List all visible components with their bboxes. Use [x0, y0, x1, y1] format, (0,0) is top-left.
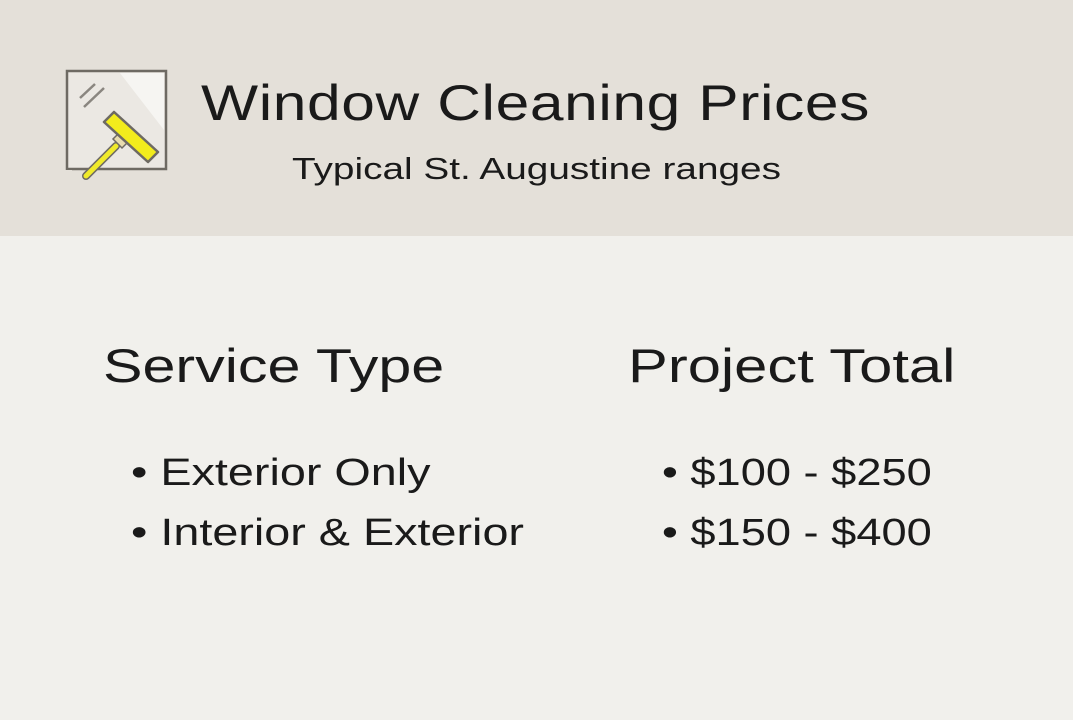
list: prices: • $100 - $250 — [662, 452, 932, 494]
list: services: • Interior & Exterior — [131, 512, 524, 554]
list: prices — [662, 452, 932, 554]
panel: service type — [103, 339, 524, 554]
heading: service type: Service Type — [103, 339, 444, 392]
header band — [0, 0, 1073, 236]
icon: window squeegee — [66, 70, 168, 180]
subtitle: Typical St. Augustine ranges — [292, 151, 781, 186]
heading: project total: Project Total — [628, 339, 955, 392]
list: services: • Exterior Only — [131, 452, 430, 494]
panel: project total — [628, 339, 955, 554]
list: prices: • $150 - $400 — [662, 512, 932, 554]
title: Window Cleaning Prices — [201, 75, 870, 131]
list: services — [131, 452, 524, 554]
